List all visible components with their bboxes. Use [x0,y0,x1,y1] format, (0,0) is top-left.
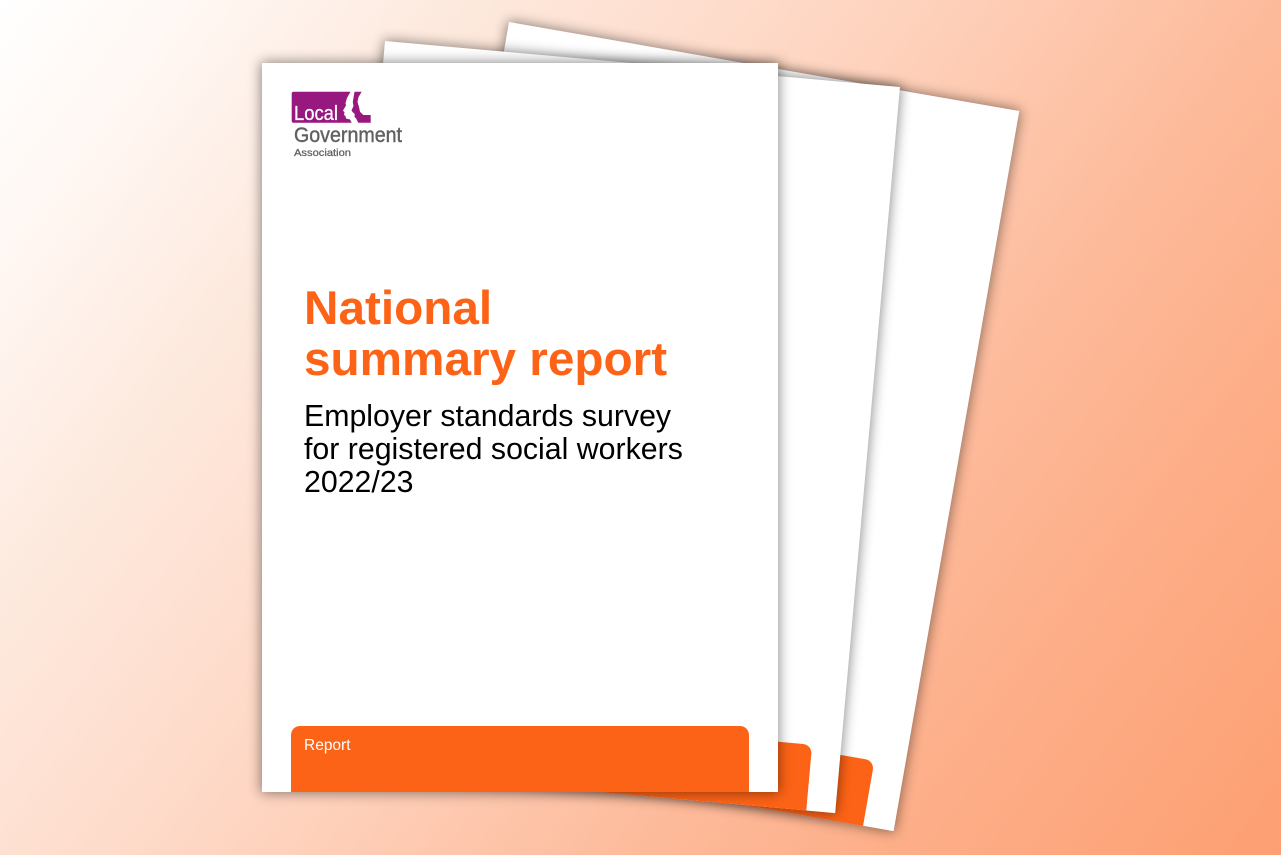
middle sheet orange tab [349,704,812,810]
logo: Local Government Association: Local [294,102,338,125]
front report cover [262,63,778,792]
back sheet orange tab [412,682,874,826]
title [304,282,667,386]
title: summary report [304,333,667,386]
back sheet [383,22,1019,831]
logo: Local Government Association [292,92,402,159]
orange report tab [291,726,749,792]
subtitle: Employer standards survey [304,400,671,433]
logo: Local Government Association: Association [294,148,351,159]
title: National [304,282,492,335]
subtitle: for registered social workers [304,433,683,466]
middle sheet [320,41,900,813]
subtitle [304,400,683,499]
subtitle: 2022/23 [304,466,414,499]
tab label: Report [304,737,351,754]
logo: Local Government Association: Government [294,124,402,147]
